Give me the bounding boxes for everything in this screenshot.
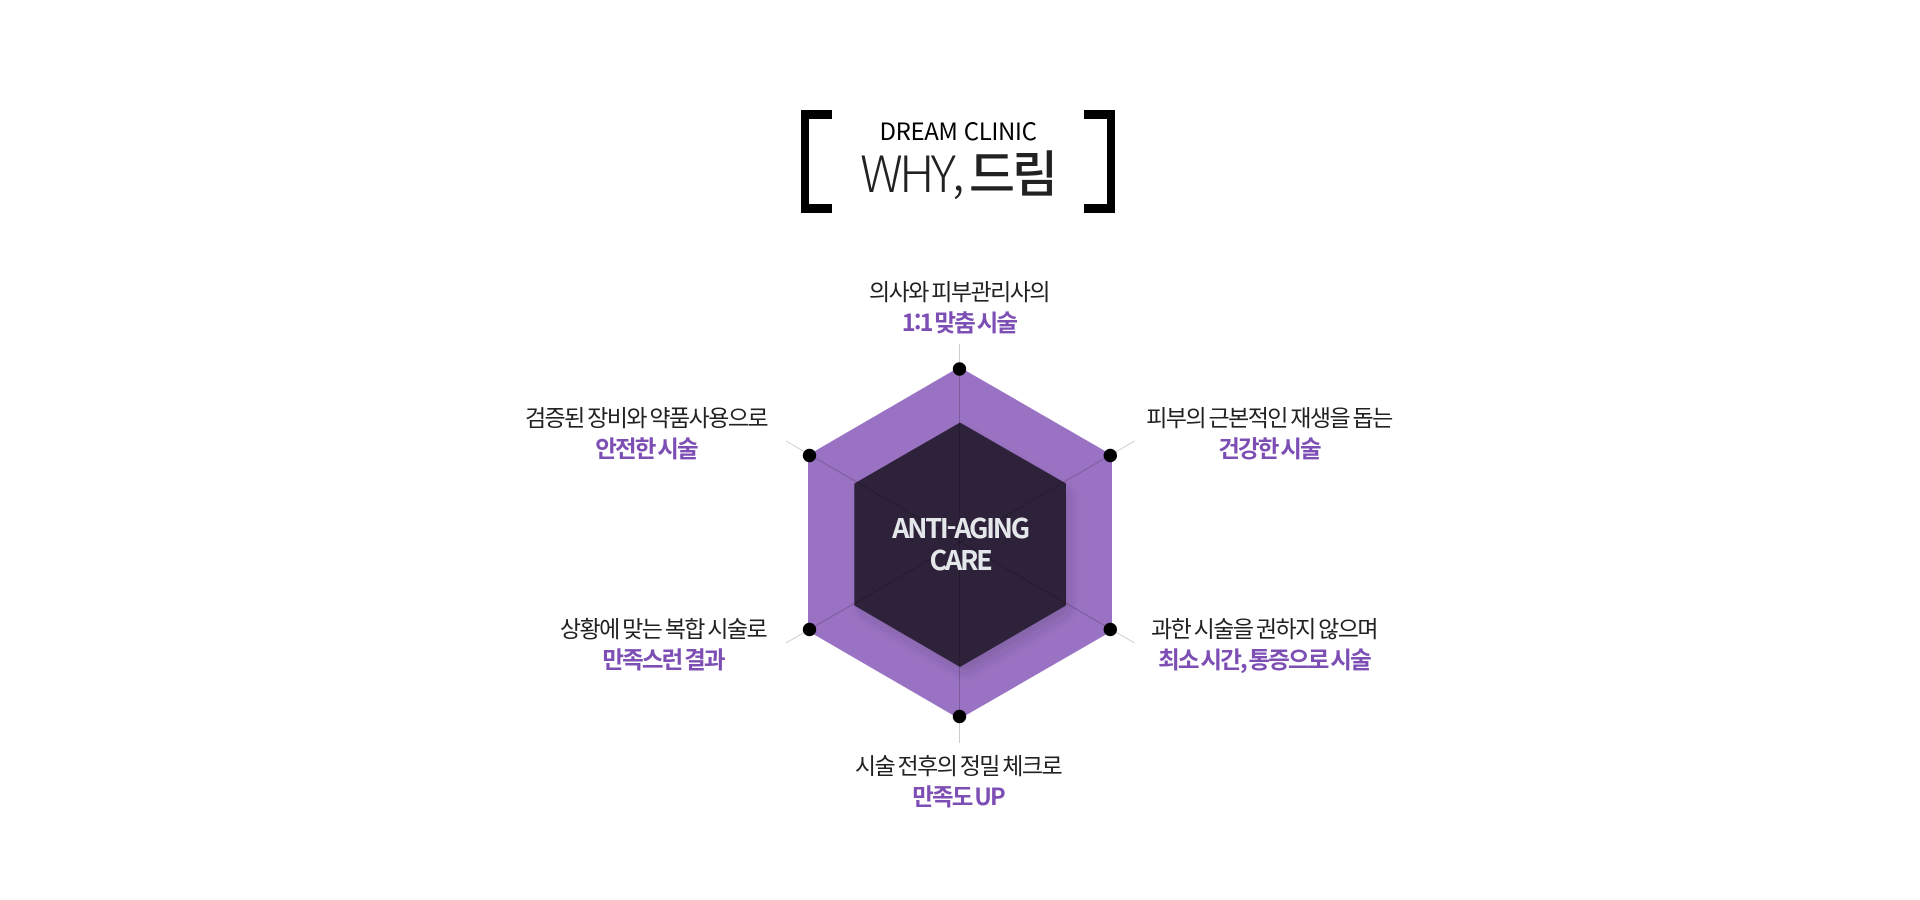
left bracket — [801, 110, 832, 213]
label: bottom — [855, 747, 1062, 812]
center label — [892, 507, 1028, 578]
label: top: 의사와 피부관리사의 — [869, 273, 1049, 307]
subtitle: DREAM CLINIC — [880, 112, 1036, 147]
label: top: 1:1 맞춤 시술 — [902, 304, 1016, 338]
center label: ANTI-AGING — [892, 507, 1028, 546]
inner hexagon — [854, 422, 1066, 667]
label: lower right — [1151, 610, 1377, 675]
label: top — [869, 273, 1049, 338]
label: upper left: 안전한 시술 — [595, 430, 697, 464]
label: upper right — [1146, 399, 1392, 464]
label: bottom: 만족도 UP — [912, 778, 1004, 812]
outer hexagon — [808, 367, 1112, 719]
label: lower left — [560, 610, 766, 675]
label: upper left: 검증된 장비와 약품사용으로 — [525, 399, 767, 433]
title: WHY, 드림 — [860, 135, 1055, 207]
center label: CARE — [929, 539, 991, 578]
spoke lines — [786, 344, 1135, 743]
label: upper left — [525, 399, 768, 464]
label: bottom: 시술 전후의 정밀 체크로 — [855, 747, 1061, 781]
label: upper right: 피부의 근본적인 재생을 돕는 — [1146, 399, 1392, 433]
heading: bracketed title — [801, 110, 1115, 213]
label: lower right: 최소 시간, 통증으로 시술 — [1158, 641, 1370, 675]
right bracket — [1084, 110, 1115, 213]
label: lower left: 만족스런 결과 — [602, 641, 724, 675]
label: lower right: 과한 시술을 권하지 않으며 — [1151, 610, 1377, 644]
label: upper right: 건강한 시술 — [1218, 430, 1320, 464]
vertex dots — [803, 362, 1117, 723]
label: lower left: 상황에 맞는 복합 시술로 — [560, 610, 766, 644]
